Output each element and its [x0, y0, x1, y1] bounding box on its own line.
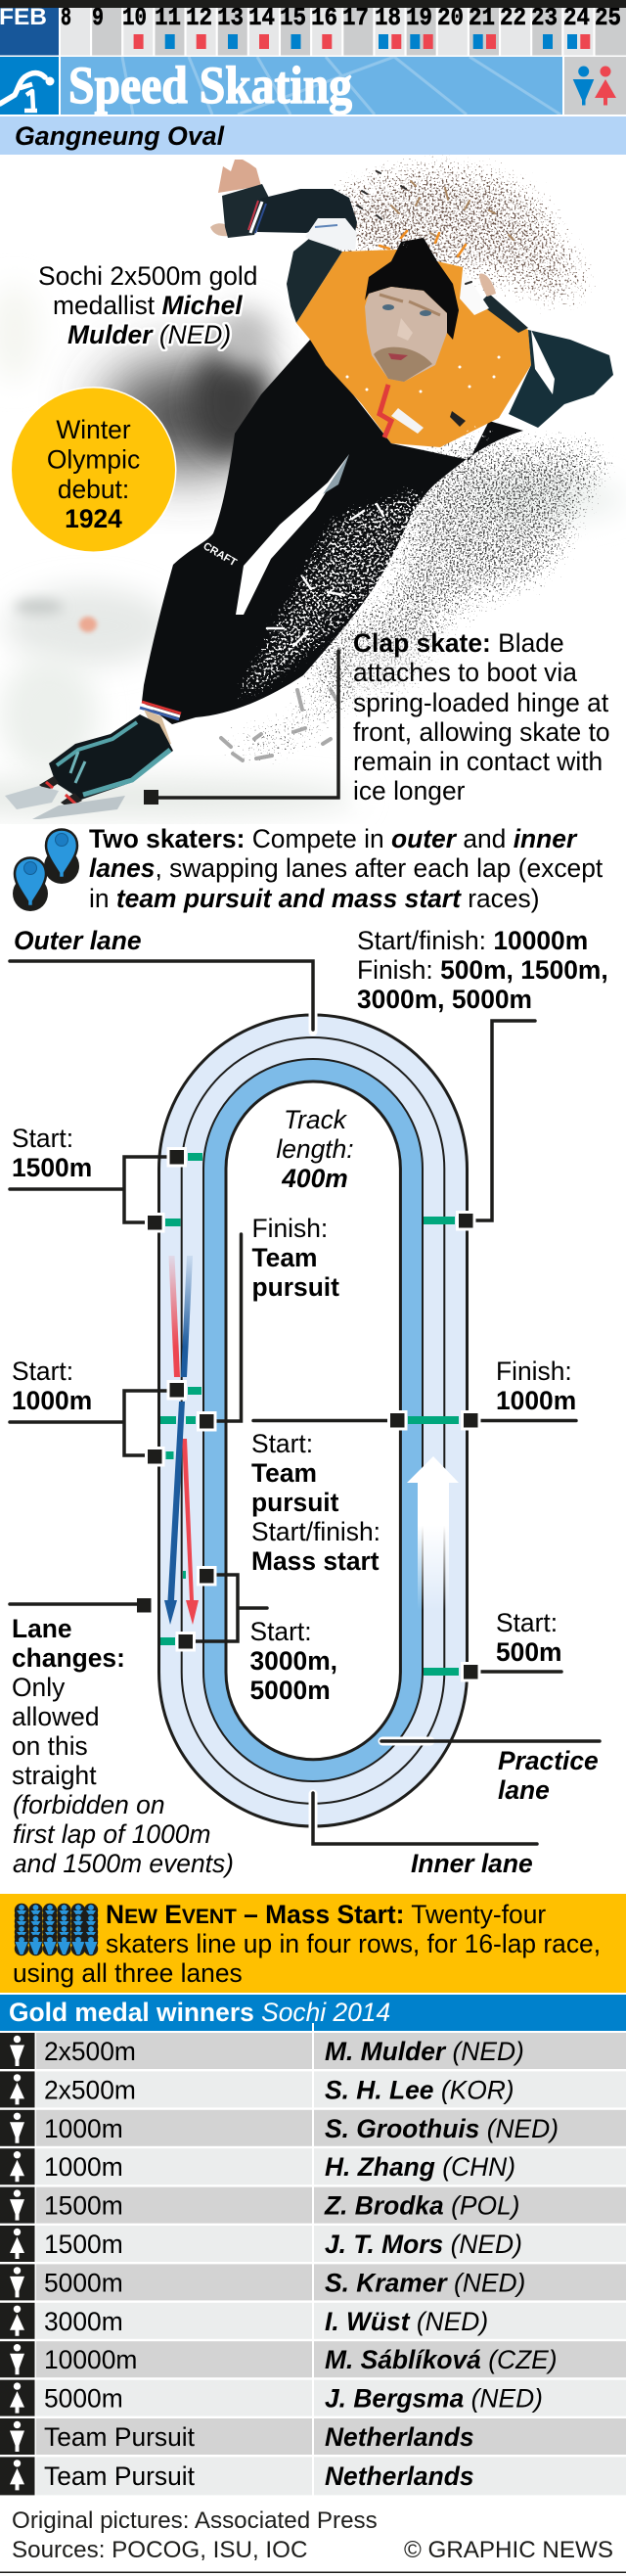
track labels: 3000m,: [250, 1646, 337, 1676]
row: 2x500m women: 2x500m: [44, 2075, 136, 2104]
ankle stripes: [140, 702, 181, 719]
track labels: Track: [284, 1105, 348, 1134]
day numbers: 21: [469, 3, 495, 32]
track labels: Start/finish:: [251, 1517, 380, 1546]
callout: clap skate: spring-loaded hinge at: [353, 688, 609, 717]
text: lane changes: Lane: [12, 1614, 72, 1643]
text: lane changes: first lap of 1000m: [13, 1819, 210, 1849]
row: 5000m women: J. Bergsma (NED): [325, 2384, 543, 2414]
track labels: Start:: [251, 1429, 313, 1458]
day numbers: 25: [595, 3, 621, 32]
row: 5000m men: 5000m: [44, 2268, 123, 2297]
row: team pursuit women: [0, 2457, 626, 2495]
lane change arrows: [164, 1256, 199, 1625]
row: 5000m women: 5000m: [44, 2384, 123, 2414]
track labels: Practice: [498, 1746, 599, 1775]
row: 5000m men: S. Kramer (NED): [325, 2268, 525, 2297]
callout: clap skate: front, allowing skate to: [353, 717, 610, 747]
day numbers: 12: [186, 3, 212, 32]
text: lane changes: [12, 1614, 234, 1878]
callout: clap skate: attaches to boot via: [353, 658, 577, 687]
row: 1000m women: [0, 2148, 626, 2185]
day numbers: 13: [217, 3, 244, 32]
text: lane changes: allowed: [12, 1702, 100, 1731]
track labels: 3000m, 5000m: [357, 985, 532, 1014]
green start and finish lines: [160, 1153, 459, 1676]
panel: skater photograph: [0, 137, 626, 824]
badge: Winter Olympic debut: 1924: [65, 504, 122, 533]
track labels: Finish: 500m, 1500m,: [357, 955, 608, 985]
row: 10000m men: 10000m: [44, 2345, 137, 2374]
day numbers: 9: [92, 3, 104, 32]
day numbers: 20: [437, 3, 464, 32]
row: 10000m men: M. Sáblíková (CZE): [325, 2345, 558, 2374]
Michel Mulder caption: medallist Michel: [53, 291, 243, 320]
row: team pursuit men: Team Pursuit: [44, 2422, 196, 2452]
month label: FEB: [0, 4, 47, 30]
footer credits: Original pictures: Associated Press: [12, 2507, 378, 2534]
track labels: length:: [276, 1134, 354, 1164]
table header: Gold medal winners Sochi 2014: [9, 1998, 390, 2027]
badge: Winter Olympic debut: Olympic: [47, 444, 140, 474]
event markers: [134, 34, 590, 49]
gold medal table: [0, 1995, 626, 2496]
row: team pursuit women: Team Pursuit: [44, 2461, 196, 2491]
row: 5000m women: [0, 2380, 626, 2416]
footer credits: © GRAPHIC NEWS: [404, 2537, 613, 2563]
calendar strip: [0, 3, 626, 55]
row: 3000m women: 3000m: [44, 2307, 123, 2336]
track labels: Team: [251, 1458, 317, 1488]
day numbers: [61, 3, 621, 32]
track labels: 1000m: [12, 1386, 92, 1415]
track labels: 400m: [281, 1164, 348, 1193]
row: 2x500m women: [0, 2071, 626, 2107]
text: lane changes: changes:: [12, 1643, 125, 1673]
row: 3000m women: [0, 2303, 626, 2339]
panel: new event mass start: NEW EVENT – Mass Start: Twenty-four: [106, 1900, 546, 1929]
text: lane changes: Only: [12, 1673, 66, 1702]
skate boots: [5, 714, 173, 819]
row: 2x500m women: S. H. Lee (KOR): [325, 2075, 514, 2104]
track labels: Start/finish: 10000m: [357, 926, 588, 955]
row: 10000m men: [0, 2341, 626, 2377]
row: 1500m men: 1500m: [44, 2191, 123, 2221]
track labels: pursuit: [251, 1488, 339, 1517]
panel: new event mass start: using all three lanes: [13, 1958, 243, 1988]
heading: Speed Skating: [68, 56, 352, 115]
track labels: Inner lane: [411, 1849, 533, 1878]
day numbers: 8: [61, 3, 71, 32]
row: 1000m men: 1000m: [44, 2114, 123, 2143]
top pointer: outer lane: [309, 961, 317, 1032]
track labels: 1500m: [12, 1153, 92, 1182]
row: 5000m men: [0, 2264, 626, 2300]
skater figure: CRAFT: [201, 540, 239, 569]
photo background blur: [0, 295, 614, 822]
footer credits: [12, 2507, 613, 2563]
row: 2x500m men: [0, 2033, 626, 2069]
day numbers: 23: [531, 3, 558, 32]
track labels: Finish:: [252, 1214, 328, 1243]
row: team pursuit women: Netherlands: [325, 2461, 474, 2491]
track labels: Mass start: [251, 1546, 380, 1576]
text: two skaters: lanes, swapping lanes after each lap (except: [89, 853, 604, 883]
day numbers: 24: [563, 3, 590, 32]
marker squares and leader lines: [10, 961, 600, 1844]
venue subheading: Gangneung Oval: [15, 121, 225, 151]
track labels: lane: [498, 1775, 550, 1805]
day numbers: 16: [311, 3, 337, 32]
icon: mass start grid of skaters: [15, 1904, 98, 1955]
day numbers: 11: [155, 3, 181, 32]
track labels: pursuit: [252, 1272, 339, 1302]
footer credits: Sources: POCOG, ISU, IOC: [12, 2537, 307, 2563]
title band: [61, 56, 562, 115]
direction arrow: [407, 1456, 459, 1610]
row: 1500m men: Z. Brodka (POL): [324, 2191, 519, 2221]
callout: clap skate: Clap skate: Blade: [353, 628, 564, 658]
text: two skaters: [89, 824, 604, 913]
track diagram: [0, 926, 626, 2573]
text: lane changes: (forbidden on: [13, 1790, 165, 1819]
row: 1000m men: S. Groothuis (NED): [325, 2114, 559, 2143]
row: team pursuit men: Netherlands: [325, 2422, 474, 2452]
day numbers: 19: [406, 3, 432, 32]
day numbers: 17: [342, 3, 369, 32]
row: 1500m women: J. T. Mors (NED): [325, 2230, 522, 2259]
row: 1000m women: H. Zhang (CHN): [325, 2152, 515, 2182]
row: 1500m women: 1500m: [44, 2230, 123, 2259]
day numbers: 10: [122, 3, 147, 32]
callout: clap skate: [144, 628, 626, 812]
icon: men and women events: [564, 57, 626, 115]
track labels: Start:: [12, 1124, 73, 1153]
inner lane pointer: [309, 1794, 317, 1840]
track labels: 500m: [496, 1637, 561, 1667]
icon: speed skater pictogram: [0, 57, 59, 115]
text: lane changes: and 1500m events): [13, 1849, 234, 1878]
row: 1500m women: [0, 2226, 626, 2262]
track labels: Outer lane: [14, 926, 142, 955]
venue subheading: [0, 116, 626, 155]
badge: Winter Olympic debut: [10, 387, 176, 553]
day numbers: 14: [248, 3, 275, 32]
day numbers: 15: [280, 3, 306, 32]
row: 3000m women: I. Wüst (NED): [325, 2307, 488, 2336]
row: 2x500m men: 2x500m: [44, 2037, 136, 2066]
row: 1500m men: [0, 2187, 626, 2224]
row: team pursuit men: [0, 2418, 626, 2455]
track labels: Finish:: [496, 1357, 572, 1386]
panel: new event mass start: skaters line up in four rows, for 16-lap race,: [106, 1929, 601, 1958]
speckled ice particles over skater: [210, 171, 514, 760]
track labels: Start:: [250, 1617, 312, 1646]
row: 2x500m men: M. Mulder (NED): [325, 2037, 524, 2066]
text: two skaters: in team pursuit and mass start races): [89, 884, 540, 913]
callout: clap skate: ice longer: [353, 776, 466, 805]
table header: [0, 1995, 626, 2031]
panel: new event mass start: [0, 1894, 626, 1993]
track labels: Start:: [12, 1357, 73, 1386]
icon: two skaters: [13, 830, 79, 911]
track labels: 5000m: [250, 1676, 331, 1705]
track labels: Team: [252, 1243, 317, 1272]
text: lane changes: on this: [12, 1731, 88, 1761]
text: two skaters: Two skaters: Compete in outer and inner: [89, 824, 578, 853]
callout: clap skate: remain in contact with: [353, 747, 603, 776]
track labels: Start:: [496, 1608, 558, 1637]
text: lane changes: straight: [12, 1761, 97, 1790]
day numbers: 18: [375, 3, 401, 32]
row: 1000m women: 1000m: [44, 2152, 123, 2182]
badge: Winter Olympic debut: debut:: [58, 475, 129, 504]
skater figure: [5, 160, 613, 819]
practice lane pointer: [382, 1736, 430, 1746]
badge: Winter Olympic debut: Winter: [56, 415, 131, 444]
loose ice particles behind skater: [181, 137, 626, 783]
track labels: 1000m: [496, 1386, 576, 1415]
Michel Mulder caption: Mulder (NED): [67, 320, 231, 349]
Michel Mulder caption: [38, 261, 257, 349]
Michel Mulder caption: Sochi 2x500m gold: [38, 261, 257, 291]
day numbers: 22: [500, 3, 526, 32]
track labels: [12, 926, 608, 1878]
row: 1000m men: [0, 2110, 626, 2146]
